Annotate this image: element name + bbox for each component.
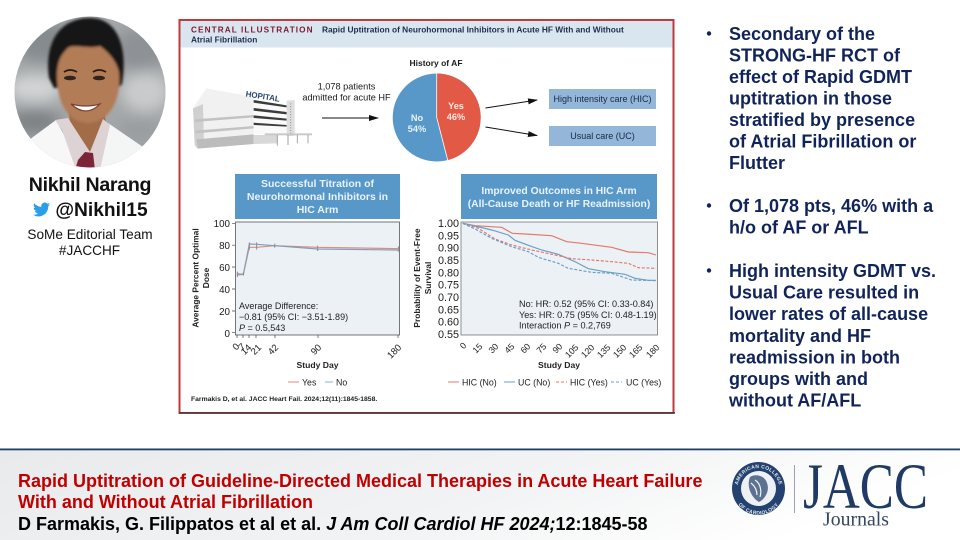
line chart: average percent optimal dose: 80 bbox=[219, 241, 231, 252]
bullet: secondary analysis: of Atrial Fibrillation or bbox=[729, 132, 916, 152]
logo: JACC Journals: JACC bbox=[803, 451, 928, 523]
bullet: secondary analysis: uptitration in those bbox=[729, 88, 892, 108]
chart heading: outcomes bbox=[461, 174, 657, 219]
line chart: event-free survival: 120 bbox=[579, 342, 596, 360]
line chart: event-free survival: 0 bbox=[458, 340, 468, 351]
line chart: event-free survival: 0.60 bbox=[438, 316, 459, 328]
arrow: to HIC bbox=[486, 100, 537, 108]
line chart: event-free survival: 15 bbox=[470, 341, 484, 355]
line chart: event-free survival: 105 bbox=[563, 342, 580, 360]
line chart: event-free survival: Survival bbox=[423, 262, 433, 294]
panel header: Rapid Uptitration of Neurohormonal Inhibitors in Acute HF With and Without bbox=[322, 24, 624, 34]
editorial team: SoMe Editorial Team bbox=[27, 227, 153, 242]
line chart: average percent optimal dose: Study Day bbox=[296, 360, 339, 370]
bullet text block bbox=[707, 24, 936, 411]
line chart: average percent optimal dose bbox=[190, 219, 403, 370]
line chart: event-free survival: 0.80 bbox=[438, 268, 459, 280]
bullet: secondary analysis: Secondary of the bbox=[729, 24, 875, 44]
line chart: event-free survival: 30 bbox=[486, 341, 500, 355]
line chart: event-free survival: Interaction P = 0.2,769 bbox=[519, 320, 611, 330]
line chart: average percent optimal dose: 0 bbox=[230, 341, 241, 352]
line chart: event-free survival: Probability of Event-Free bbox=[412, 228, 422, 328]
line chart: average percent optimal dose: 20 bbox=[219, 307, 231, 318]
line chart: event-free survival: Study Day bbox=[538, 360, 580, 370]
line chart: event-free survival: Yes: HR: 0.75 (95% CI: 0.48-1.19) bbox=[519, 310, 657, 320]
bullet: results: groups with and bbox=[729, 369, 868, 389]
bullet: results: High intensity GDMT vs. bbox=[729, 261, 936, 281]
line chart: event-free survival: 0.55 bbox=[438, 329, 459, 341]
logo: American College of Cardiology seal: OF CARDIOLOGY bbox=[739, 502, 778, 514]
bullet: secondary analysis: stratified by presence bbox=[729, 110, 915, 130]
logo: American College of Cardiology seal bbox=[732, 462, 785, 515]
line chart: event-free survival: 60 bbox=[518, 341, 532, 355]
legend: titration chart bbox=[288, 378, 347, 388]
footer band bbox=[0, 448, 960, 540]
legend: outcomes chart: HIC (Yes) bbox=[570, 378, 608, 388]
line chart: average percent optimal dose: Average Difference: bbox=[239, 301, 318, 311]
bullet: results: lower rates of all-cause bbox=[729, 304, 928, 324]
bullet: results: without AF/AFL bbox=[728, 391, 861, 411]
line chart: event-free survival bbox=[412, 218, 661, 370]
logo: JACC Journals: Journals bbox=[823, 508, 889, 530]
line chart: average percent optimal dose: 40 bbox=[219, 285, 231, 296]
legend: outcomes chart: UC (Yes) bbox=[626, 378, 661, 388]
line chart: event-free survival: 0.85 bbox=[438, 255, 459, 267]
line chart: average percent optimal dose: −0.81 (95% CI: −3.51-1.89) bbox=[239, 312, 348, 322]
box: usual care: Usual care (UC) bbox=[570, 131, 635, 141]
line chart: average percent optimal dose: 42 bbox=[265, 342, 280, 357]
line chart: average percent optimal dose: P = 0.5,543 bbox=[239, 323, 285, 333]
line chart: event-free survival: 0.90 bbox=[438, 242, 459, 254]
source citation: Farmakis D, et al. JACC Heart Fail. 2024;12(11):1845-1858. bbox=[191, 396, 377, 403]
bullet: secondary analysis: Flutter bbox=[729, 153, 785, 173]
box: high intensity care: High intensity care (HIC) bbox=[553, 94, 652, 104]
panel: central illustration bbox=[179, 20, 675, 414]
legend: outcomes chart: HIC (No) bbox=[462, 378, 497, 388]
article citation: D Farmakis, G. Filippatos et al et al. J Am Coll Cardiol HF 2024;12:1845-58 bbox=[18, 514, 648, 534]
line chart: average percent optimal dose: 180 bbox=[385, 342, 403, 360]
panel header: Atrial Fibrillation bbox=[191, 34, 257, 44]
chart heading: titration: HIC Arm bbox=[297, 204, 338, 216]
chart heading: titration bbox=[235, 174, 400, 219]
legend: titration chart: Yes bbox=[302, 378, 317, 388]
hashtag: #JACCHF bbox=[59, 243, 120, 258]
line chart: event-free survival: 165 bbox=[627, 342, 644, 360]
line chart: event-free survival: 90 bbox=[550, 341, 564, 355]
bullet: secondary analysis: STRONG-HF RCT of bbox=[729, 46, 901, 66]
line chart: event-free survival: 1.00 bbox=[438, 218, 459, 230]
line chart: event-free survival: 0.75 bbox=[438, 280, 459, 292]
chart heading: titration: Neurohormonal Inhibitors in bbox=[247, 191, 388, 203]
line chart: event-free survival: 150 bbox=[611, 342, 628, 360]
icon: hospital building: HOPITAL bbox=[245, 89, 281, 104]
bullet: patient count: Of 1,078 pts, 46% with a bbox=[729, 196, 934, 216]
icon: twitter bird bbox=[33, 203, 50, 216]
bullet: patient count bbox=[707, 196, 934, 238]
legend: outcomes chart: UC (No) bbox=[518, 378, 550, 388]
line chart: average percent optimal dose: Dose bbox=[201, 267, 211, 288]
pie chart: history of AF: 54% bbox=[408, 124, 426, 134]
legend: outcomes chart bbox=[448, 378, 661, 388]
logo: American College of Cardiology seal: AMERICAN COLLEGE bbox=[734, 464, 782, 485]
bullet: results bbox=[707, 261, 936, 411]
patients label: 1,078 patients bbox=[318, 82, 376, 92]
line chart: average percent optimal dose: 14 bbox=[238, 342, 253, 357]
line chart: event-free survival: No: HR: 0.52 (95% CI: 0.33-0.84) bbox=[519, 299, 653, 309]
line chart: event-free survival: 0.65 bbox=[438, 304, 459, 316]
icon: hospital building bbox=[193, 88, 312, 149]
panel header: CENTRAL ILLUSTRATION bbox=[191, 26, 314, 34]
line chart: average percent optimal dose: 100 bbox=[214, 219, 231, 230]
logo divider bbox=[794, 465, 795, 513]
legend: titration chart: No bbox=[336, 378, 347, 388]
line chart: average percent optimal dose: 0 bbox=[225, 329, 231, 340]
bullet: secondary analysis: effect of Rapid GDMT bbox=[729, 67, 912, 87]
line chart: average percent optimal dose: 90 bbox=[308, 342, 323, 357]
box: usual care bbox=[549, 126, 656, 146]
twitter handle: @Nikhil15 bbox=[55, 200, 148, 221]
pie chart: history of AF: History of AF bbox=[409, 58, 463, 68]
chart heading: outcomes: Improved Outcomes in HIC Arm bbox=[481, 186, 637, 197]
line chart: event-free survival: 0.70 bbox=[438, 292, 459, 304]
article title: Rapid Uptitration of Guideline-Directed Medical Therapies in Acute Heart Failure bbox=[18, 471, 702, 491]
pie chart: history of AF bbox=[393, 58, 481, 162]
line chart: average percent optimal dose: 21 bbox=[248, 342, 263, 357]
pie chart: history of AF: Yes bbox=[448, 101, 464, 111]
line chart: event-free survival: 75 bbox=[534, 341, 548, 355]
line chart: average percent optimal dose: 7 bbox=[236, 341, 247, 352]
bullet: results: Usual Care resulted in bbox=[729, 283, 919, 303]
panel: central illustration: admitted for acute HF bbox=[302, 92, 391, 102]
line chart: average percent optimal dose: 60 bbox=[219, 263, 231, 274]
line chart: event-free survival: 135 bbox=[595, 342, 612, 360]
chart heading: titration: Successful Titration of bbox=[261, 178, 374, 190]
line chart: average percent optimal dose: Average Percent Optimal bbox=[190, 228, 200, 328]
chart heading: outcomes: (All-Cause Death or HF Readmission) bbox=[468, 199, 650, 210]
bullet: results: readmission in both bbox=[729, 347, 900, 367]
line chart: event-free survival: 180 bbox=[644, 342, 661, 360]
arrow: to pie bbox=[322, 117, 378, 119]
line chart: event-free survival: 0.95 bbox=[438, 230, 459, 242]
footer band: With and Without Atrial Fibrillation bbox=[18, 492, 313, 512]
speaker name: Nikhil Narang bbox=[29, 174, 151, 196]
bullet: patient count: h/o of AF or AFL bbox=[729, 218, 869, 238]
line chart: event-free survival: 45 bbox=[502, 341, 516, 355]
bullet: secondary analysis bbox=[707, 24, 916, 173]
pie chart: history of AF: 46% bbox=[447, 112, 465, 122]
pie chart: history of AF: No bbox=[411, 113, 424, 123]
panel header bbox=[180, 21, 672, 48]
bullet: results: mortality and HF bbox=[729, 326, 871, 346]
arrow: to UC bbox=[486, 127, 537, 136]
speaker photo bbox=[7, 16, 169, 172]
box: high intensity care bbox=[549, 89, 656, 109]
